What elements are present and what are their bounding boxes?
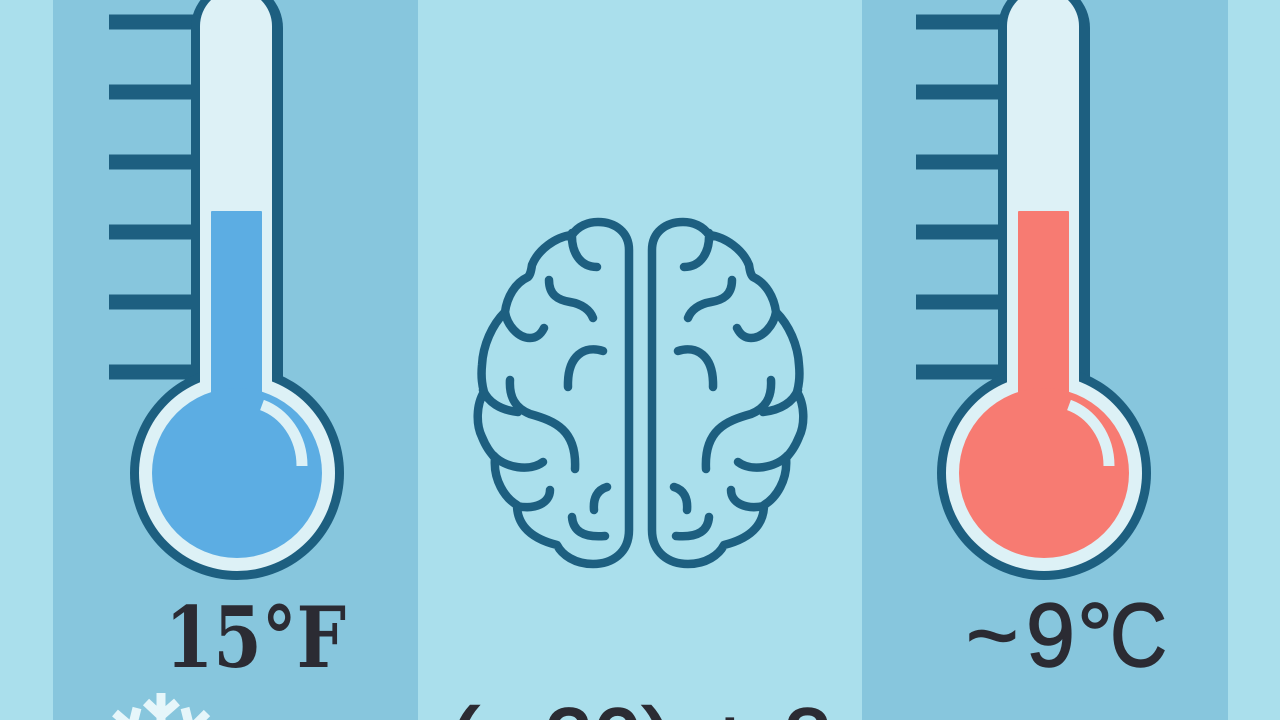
panel: left fahrenheit column [53,0,418,720]
brain left hemisphere [478,222,629,564]
icon: cold thermometer [109,0,344,580]
icon: snowflake [115,693,207,720]
label: ~9°C: C [1110,586,1167,686]
label: 15°F: 15°F [165,588,346,687]
label: ~9°C: ~ [966,586,1019,686]
icon: warm thermometer [916,0,1151,580]
label: ~9°C [966,586,1167,686]
panel: right celsius column [862,0,1228,720]
icon: brain [478,222,803,564]
label: ~9°C: 9 [1026,586,1075,686]
label: ~9°C: ° [1077,586,1113,686]
brain right hemisphere [652,222,803,564]
